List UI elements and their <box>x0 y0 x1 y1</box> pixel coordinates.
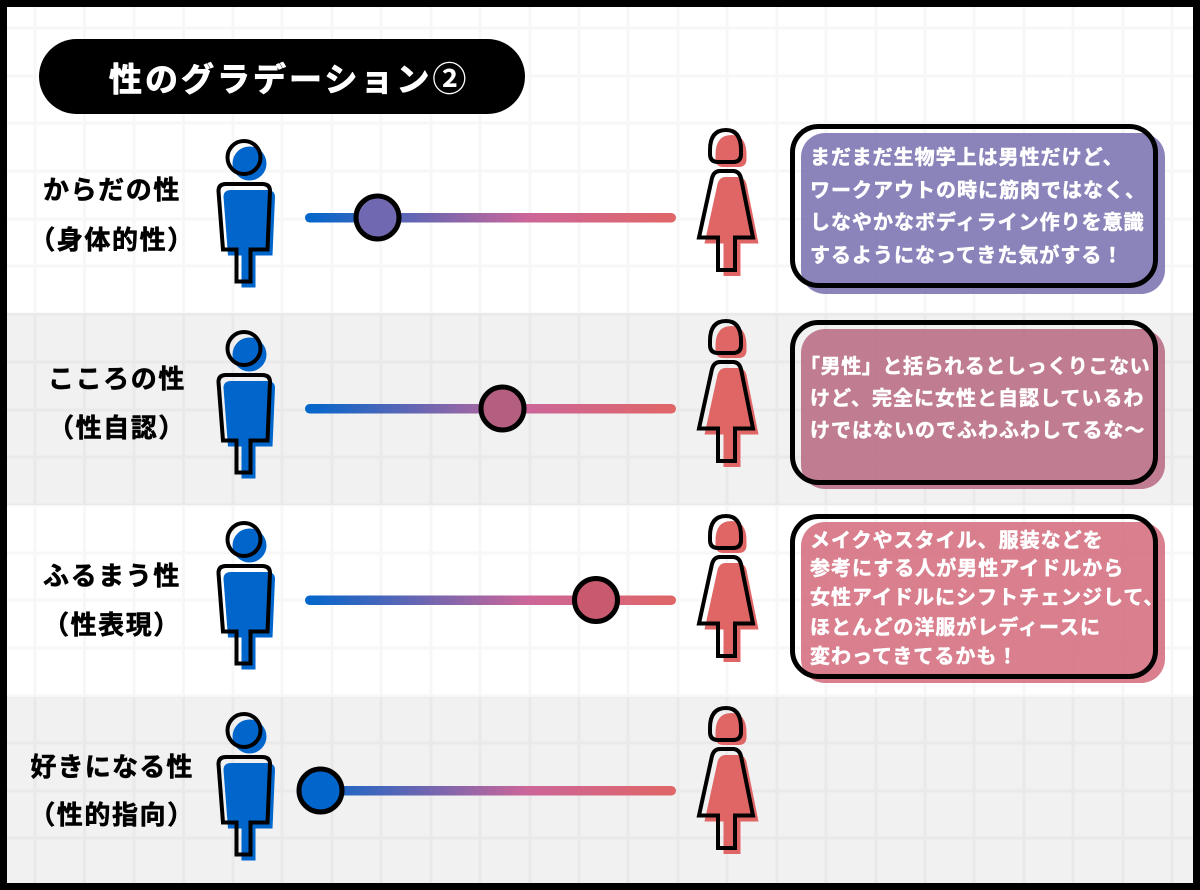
callout: こころの性 comment: けではないのでふわふわしてるな～ <box>810 419 1145 442</box>
row label: ふるまう性（性表現） <box>43 561 181 640</box>
row label: からだの性（身体的性）: （身体的性） <box>29 225 195 255</box>
row label: こころの性（性自認）: （性自認） <box>48 413 186 443</box>
row label: 好きになる性（性的指向）: （性的指向） <box>29 800 195 830</box>
callout: ふるまう性 comment: ほとんどの洋服がレディースに <box>810 615 1101 639</box>
icon: male figure <box>218 714 275 860</box>
gradient scale with marker <box>305 387 676 430</box>
callout: からだの性 comment: するようになってきた気がする！ <box>810 243 1123 267</box>
callout: ふるまう性 comment <box>792 516 1165 683</box>
icon: male figure <box>218 141 275 288</box>
icon: female figure <box>699 130 758 276</box>
callout: ふるまう性 comment: 参考にする人が男性アイドルから <box>810 556 1124 580</box>
callout: ふるまう性 comment: メイクやスタイル、服装などを <box>810 529 1104 552</box>
panel: 好きになる性 row <box>29 708 758 860</box>
panel: ふるまう性 row <box>43 516 1165 683</box>
icon: female figure <box>699 321 758 467</box>
row label: ふるまう性（性表現）: （性表現） <box>43 610 181 640</box>
title: 性のグラデーション② <box>109 61 469 99</box>
panel: からだの性 row <box>29 126 1165 294</box>
row label: 好きになる性（性的指向） <box>29 752 195 830</box>
callout: こころの性 comment: けど、完全に女性と自認しているわ <box>810 387 1144 410</box>
row label: 好きになる性（性的指向）: 好きになる性 <box>30 752 194 782</box>
callout: こころの性 comment: 「男性」と括られるとしっくりこない <box>800 355 1150 378</box>
icon: male figure <box>218 523 275 670</box>
callout: ふるまう性 comment: 女性アイドルにシフトチェンジして、 <box>810 586 1164 609</box>
icon: female figure <box>699 516 758 662</box>
callout: ふるまう性 comment: 変わってきてるかも！ <box>810 645 1018 668</box>
title <box>39 39 525 114</box>
row label: からだの性（身体的性）: からだの性 <box>43 175 181 205</box>
gradient scale with marker <box>305 578 676 622</box>
icon: female figure <box>699 708 758 854</box>
gradient scale with marker <box>299 769 676 812</box>
row label: こころの性（性自認） <box>48 364 186 443</box>
row label: こころの性（性自認）: こころの性 <box>48 364 186 394</box>
callout: からだの性 comment: ワークアウトの時に筋肉ではなく、 <box>810 179 1146 202</box>
gradient scale with marker <box>305 196 676 239</box>
callout: からだの性 comment: まだまだ生物学上は男性だけど、 <box>810 146 1124 169</box>
callout: からだの性 comment: しなやかなボディライン作りを意識 <box>810 210 1145 234</box>
icon: male figure <box>218 332 275 478</box>
panel: こころの性 row <box>48 321 1165 489</box>
row label: からだの性（身体的性） <box>29 175 195 255</box>
callout: こころの性 comment <box>792 322 1165 489</box>
row label: ふるまう性（性表現）: ふるまう性 <box>43 561 181 591</box>
callout: からだの性 comment <box>792 126 1165 294</box>
